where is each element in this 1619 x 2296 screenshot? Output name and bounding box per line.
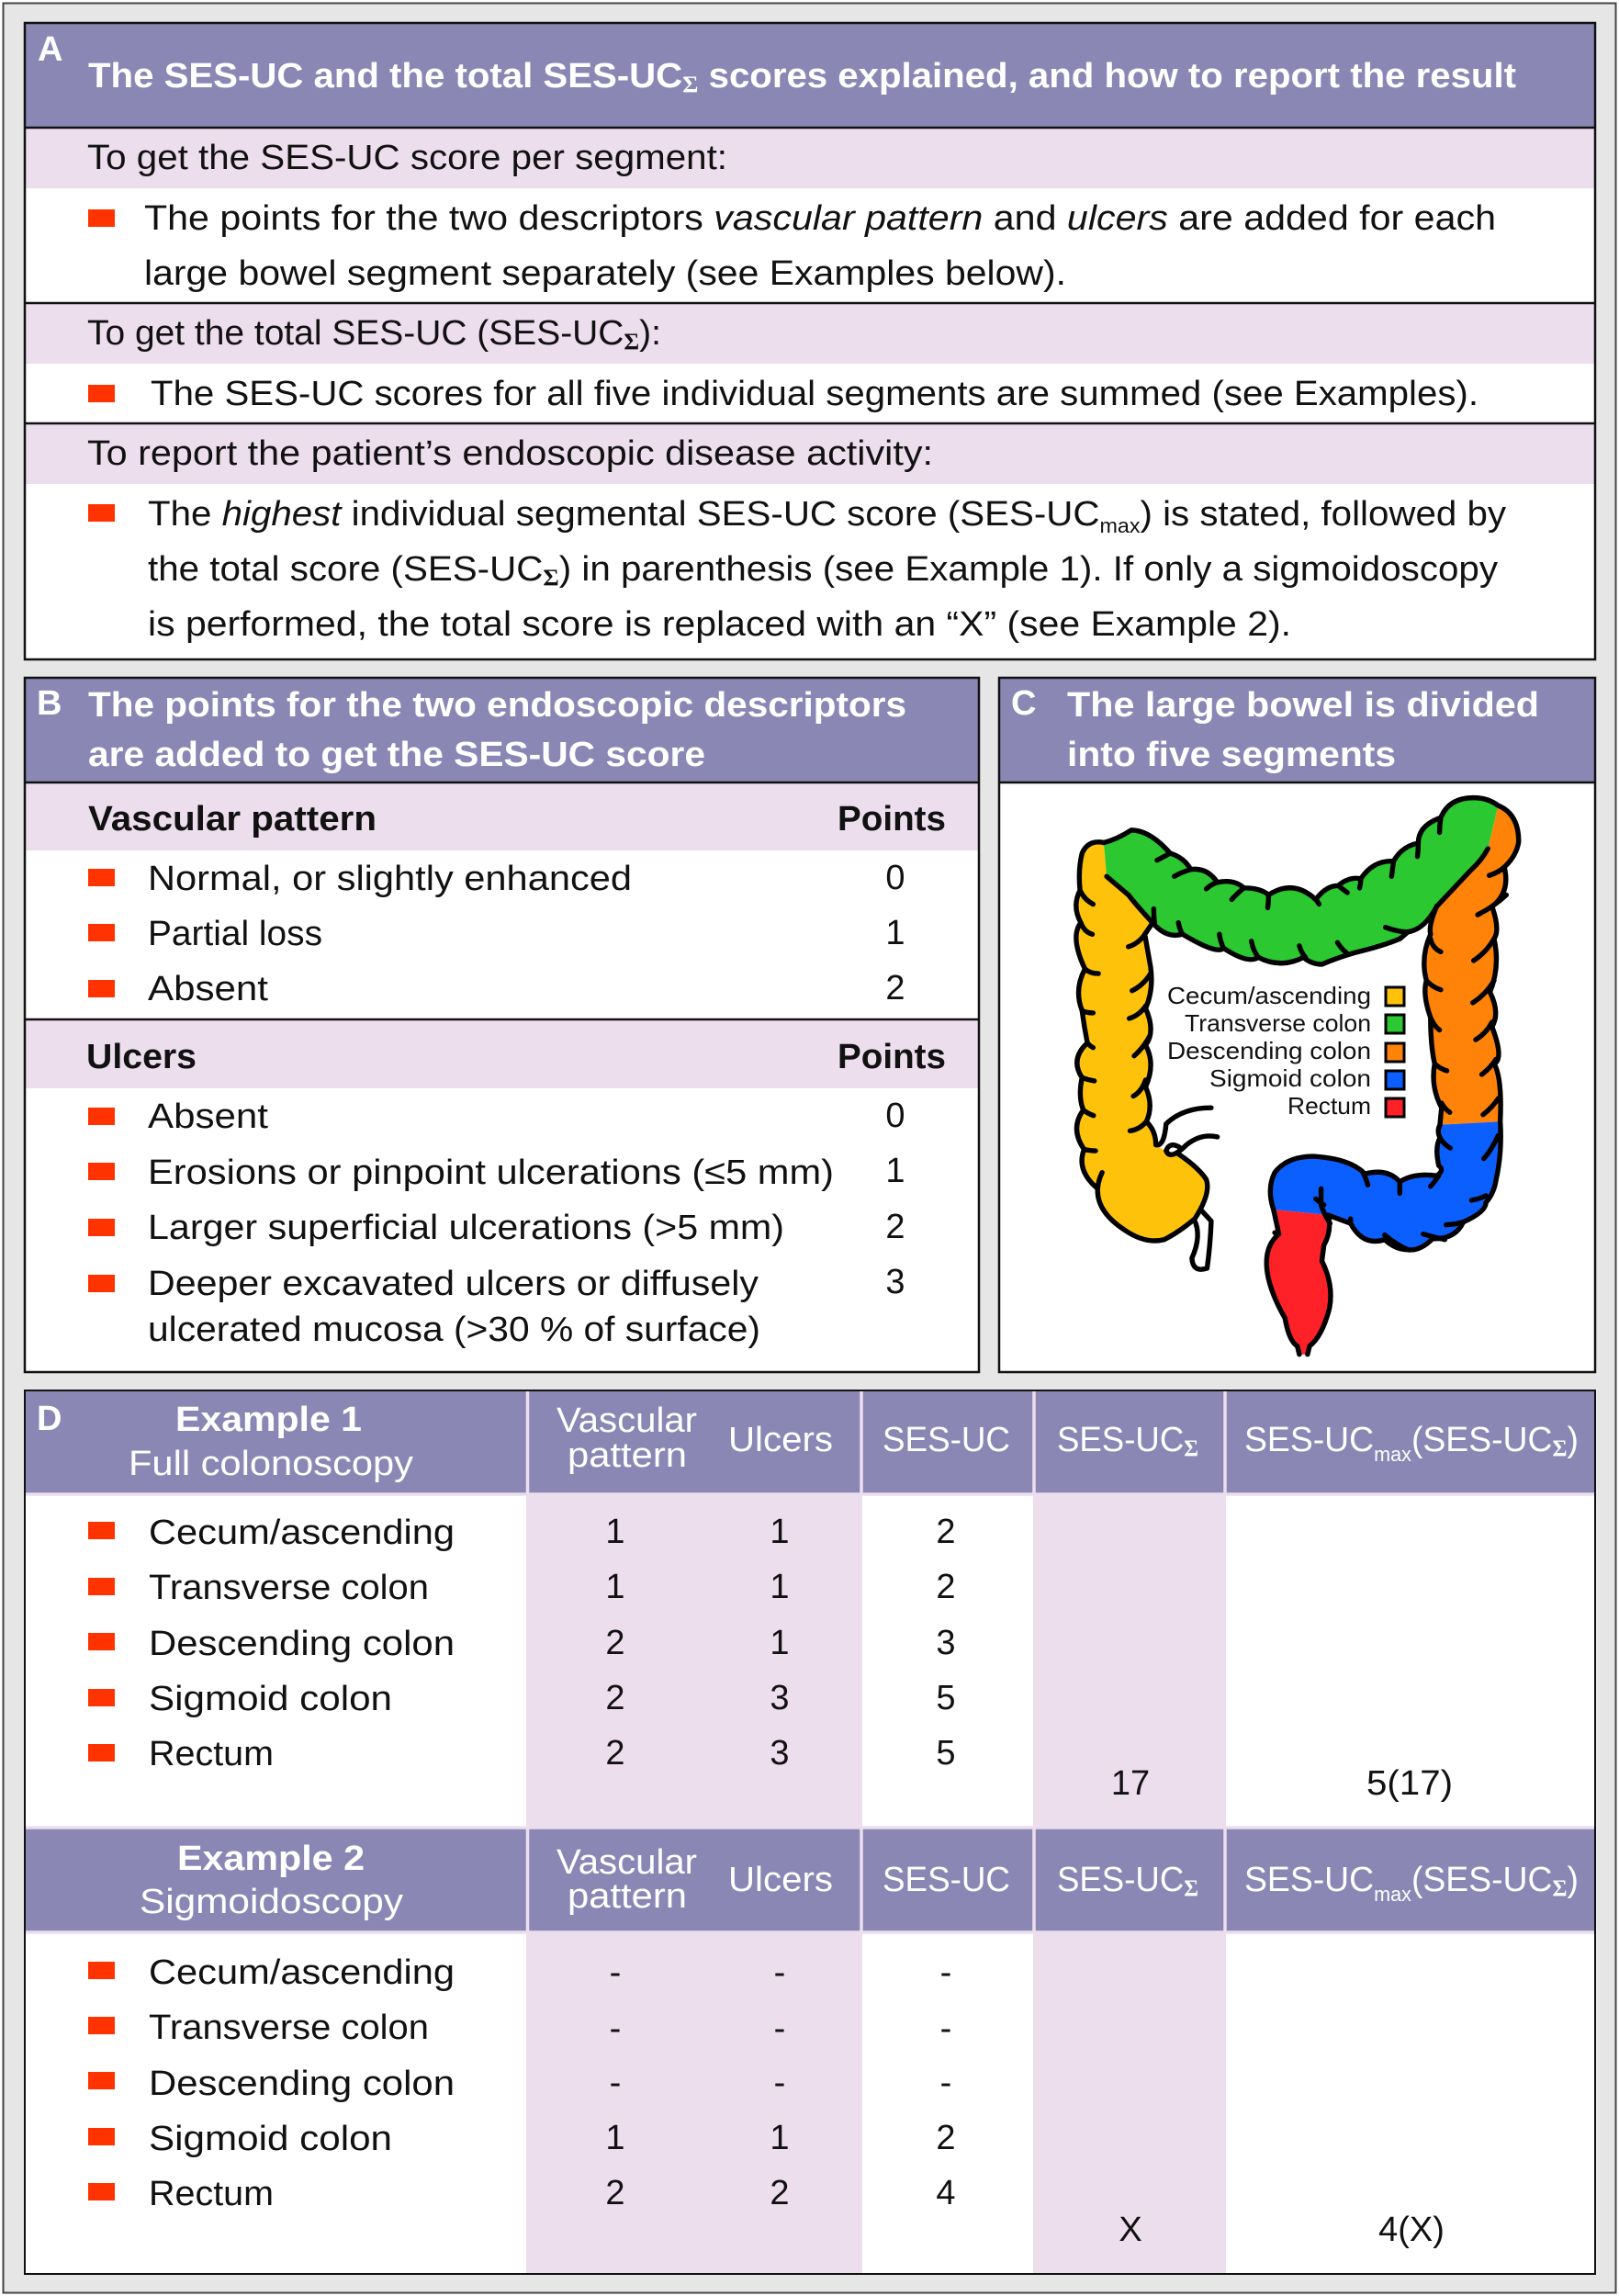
example 2 subtitle: Sigmoidoscopy [140, 1883, 403, 1921]
example 1 rows: 2 [605, 1624, 625, 1662]
example 2 rows: - [940, 2064, 951, 2102]
column headings: (SES-UC [1411, 1861, 1552, 1899]
ulcers rows [88, 1097, 905, 1349]
example 1 rows: 1 [605, 1568, 625, 1606]
column headings [557, 1843, 1579, 1916]
example 1 rows: 1 [770, 1513, 790, 1551]
points column heading: Points [838, 800, 946, 838]
example 1 rows: Descending colon [149, 1625, 455, 1663]
subheading: reporting: To report the patient’s endoscopic disease activity: [87, 434, 933, 473]
example 2 rows: Transverse colon [149, 2009, 429, 2047]
example 2 rows: Rectum [149, 2175, 274, 2213]
column headings [557, 1401, 1579, 1475]
example 2 rows: - [610, 2009, 621, 2048]
example 2 header band [25, 1828, 1595, 1932]
panel letter A: A [38, 30, 62, 69]
column headings: ) [1568, 1421, 1579, 1459]
example 1 rows [88, 1513, 956, 1773]
example 1 rows: 1 [770, 1624, 790, 1662]
ulcers table heading: Ulcers [86, 1038, 197, 1076]
bullet [88, 209, 115, 227]
bullet [88, 385, 115, 402]
example 2 rows: - [610, 1953, 621, 1992]
column headings: SES-UC [1244, 1421, 1377, 1459]
panel B heading: The points for the two endoscopic descriptors [88, 686, 906, 725]
example 2 rows: Sigmoid colon [149, 2120, 392, 2158]
panel C heading: into five segments [1067, 736, 1396, 774]
example 1 rows: 2 [936, 1513, 956, 1551]
ulcers rows: Erosions or pinpoint ulcerations (≤5 mm) [148, 1154, 834, 1192]
text block: adding descriptor points: The points for the two descriptors vascular pattern and ulcers are added for each [144, 199, 1496, 238]
colon legend: Descending colon [1167, 1037, 1371, 1064]
example 2 rows: 1 [605, 2119, 625, 2157]
example 2 rows: Cecum/ascending [149, 1953, 455, 1992]
example 2 rows: - [774, 1953, 785, 1992]
column headings: SES-UC [1244, 1861, 1377, 1899]
column headings: Σ [1184, 1876, 1198, 1901]
example 1 reported result: 5(17) [1366, 1764, 1453, 1803]
column headings: Ulcers [728, 1861, 833, 1899]
column headings: Vascular [557, 1401, 697, 1440]
ulcers rows: Deeper excavated ulcers or diffusely [148, 1265, 759, 1303]
segment: transverse colon [1104, 798, 1498, 964]
panel C heading [1067, 686, 1539, 774]
example 1 rows: 1 [770, 1568, 790, 1606]
ulcers rows: 1 [885, 1152, 905, 1190]
text block: how to report [148, 495, 1506, 644]
text block: how to report: ) is stated, followed by [1141, 495, 1506, 534]
column headings: Σ [1184, 1436, 1198, 1461]
panel D border [25, 1390, 1595, 2274]
example 1 subtitle: Full colonoscopy [129, 1445, 413, 1483]
vascular pattern rows: Absent [148, 970, 268, 1008]
segment: rectum [1266, 1210, 1331, 1355]
column headings: Ulcers [728, 1421, 833, 1459]
ulcers rows: 0 [885, 1097, 905, 1135]
example 2 rows: 2 [936, 2119, 956, 2157]
example 1 rows: 2 [605, 1679, 625, 1717]
example 1 total score: 17 [1111, 1764, 1150, 1803]
ulcers rows: Absent [148, 1097, 268, 1136]
example 1 rows: 3 [770, 1679, 790, 1717]
example 1 header band [25, 1390, 1595, 1494]
ulcers rows: 3 [885, 1263, 905, 1301]
subheading: total score: Σ [624, 330, 639, 355]
example 2 rows [88, 1953, 956, 2213]
column headings: max [1374, 1883, 1411, 1906]
text block: how to report: the total score (SES-UC [148, 550, 520, 589]
panel D: worked examples [25, 1390, 1595, 2274]
points column heading: Points [838, 1038, 946, 1076]
example 1 rows: Cecum/ascending [149, 1514, 455, 1552]
colon outline and haustral folds [1076, 798, 1519, 1355]
text block: adding descriptor points: large bowel segment separately (see Examples below). [144, 254, 1066, 293]
vascular pattern rows [88, 859, 905, 1008]
column headings: max [1374, 1443, 1411, 1466]
example 2 rows: 2 [605, 2174, 625, 2212]
ulcers rows: ulcerated mucosa (>30 % of surface) [148, 1311, 760, 1349]
example 2 rows: - [940, 2009, 951, 2048]
column headings: Σ [1552, 1876, 1568, 1901]
text block: summing segments: The SES-UC scores for all five individual segments are summed (see Examples). [151, 375, 1478, 413]
column headings: Σ [1552, 1436, 1568, 1461]
example 1 rows: 2 [605, 1734, 625, 1773]
example 2 total score: X [1119, 2211, 1142, 2249]
example 1 rows: Transverse colon [149, 1569, 429, 1607]
column headings: SES-UC [883, 1861, 1010, 1899]
text block: how to report: Σ [543, 566, 559, 591]
panel letter B: B [37, 684, 62, 723]
column headings: pattern [568, 1877, 687, 1916]
text block: how to report: The highest individual segmental SES-UC score (SES-UC [148, 495, 1057, 534]
pink columns [526, 1494, 1226, 2273]
panel A heading: The SES-UC and the total SES-UC [88, 57, 650, 96]
example 1 title: Example 1 [175, 1401, 362, 1439]
text block: how to report: ) in parenthesis (see Example 1). If only a sigmoidoscopy [559, 550, 1498, 589]
example 1 rows: 3 [936, 1624, 956, 1662]
example 1 rows: 3 [770, 1734, 790, 1773]
column headings: SES-UC [1057, 1421, 1189, 1459]
example 2 rows: Descending colon [149, 2065, 455, 2103]
vascular pattern table heading: Vascular pattern [88, 800, 377, 838]
example 2 rows: - [774, 2064, 785, 2102]
column headings: SES-UC [1057, 1861, 1189, 1899]
example 2 rows: - [610, 2064, 621, 2102]
text block: adding descriptor points [144, 199, 1496, 293]
column headings: SES-UC [883, 1421, 1010, 1459]
bullet [88, 504, 115, 522]
example 2 title: Example 2 [177, 1840, 365, 1878]
example 1 rows: 1 [605, 1513, 625, 1551]
colon illustration [1076, 798, 1519, 1355]
subheading: score per segment: To get the SES-UC score per segment: [87, 139, 727, 177]
colon legend: Rectum [1287, 1092, 1371, 1120]
colon legend [1167, 982, 1404, 1120]
example 2 rows: - [774, 2009, 785, 2048]
panel A: explanation of scores [25, 23, 1595, 659]
ulcers rows: 2 [885, 1208, 905, 1246]
subheading: total score: ): [639, 314, 661, 353]
colon legend: Cecum/ascending [1167, 982, 1371, 1009]
panel C heading: The large bowel is divided [1067, 686, 1539, 725]
example 1 rows: 2 [936, 1568, 956, 1606]
panel letter D: D [37, 1400, 62, 1438]
vascular pattern rows: 1 [885, 914, 905, 952]
panel A heading: Σ [682, 73, 698, 97]
appendix [1192, 1209, 1211, 1269]
column headings: Vascular [557, 1843, 697, 1882]
segment: sigmoid colon [1270, 1121, 1501, 1250]
vascular pattern rows: 0 [885, 859, 905, 897]
panel B: points for endoscopic descriptors [25, 678, 979, 1372]
vascular pattern rows: 2 [885, 969, 905, 1007]
ulcers rows: Larger superficial ulcerations (>5 mm) [148, 1209, 784, 1247]
panel A heading: scores explained, and how to report the result [698, 57, 1516, 96]
vascular pattern rows: Normal, or slightly enhanced [148, 860, 632, 898]
text block: how to report: is performed, the total score is replaced with an “X” (see Example 2). [148, 605, 1291, 644]
colon legend: Transverse colon [1185, 1009, 1371, 1037]
example 2 rows: 4 [936, 2174, 956, 2212]
colon legend: Sigmoid colon [1209, 1064, 1371, 1092]
example 1 rows: Rectum [149, 1735, 274, 1773]
column headings: (SES-UC [1411, 1421, 1552, 1459]
panel letter C: C [1011, 684, 1036, 723]
column headings: pattern [568, 1436, 687, 1475]
panel B heading: are added to get the SES-UC score [88, 736, 705, 774]
subheading: total score: To get the total SES-UC (SES-UC [87, 314, 611, 353]
segment: descending colon [1424, 805, 1519, 1125]
panel B heading [88, 686, 906, 774]
example 1 rows: Sigmoid colon [149, 1680, 392, 1718]
segment: cecum and ascending colon [1076, 842, 1208, 1241]
text block: how to report: max [1099, 514, 1141, 537]
example 1 rows: 5 [936, 1679, 956, 1717]
panel C: large bowel segments [999, 678, 1595, 1372]
vascular pattern rows: Partial loss [148, 915, 322, 953]
terminal ileum [1156, 1108, 1218, 1154]
example 2 rows: - [940, 1953, 951, 1992]
column headings: ) [1568, 1861, 1579, 1899]
example 2 rows: 2 [770, 2174, 790, 2212]
example 2 reported result: 4(X) [1378, 2211, 1445, 2249]
example 1 rows: 5 [936, 1734, 956, 1773]
example 2 rows: 1 [770, 2119, 790, 2157]
